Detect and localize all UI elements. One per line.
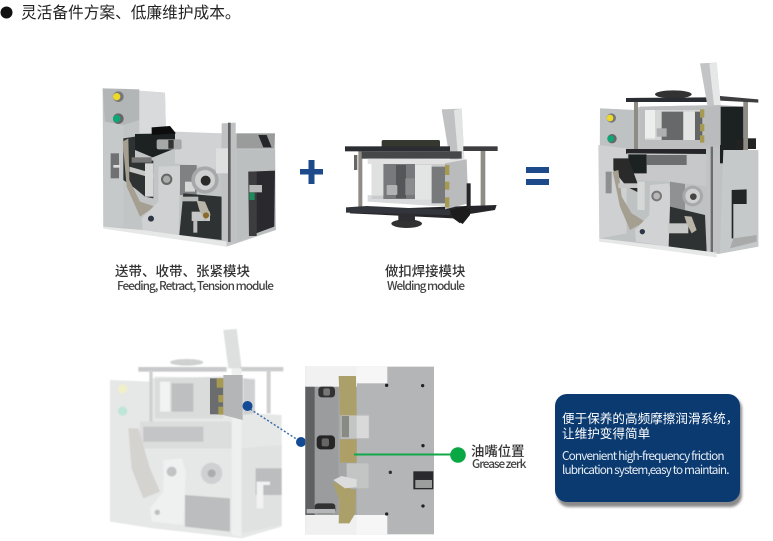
label: welding module (385, 260, 465, 294)
detail photo: grease zerk (305, 367, 434, 534)
callout: lubrication system: 便于保养的高频摩擦润滑系统， (562, 408, 738, 427)
callout: lubrication system: lubrication system,easy to maintain. (562, 461, 729, 478)
green pointer line and dot (354, 447, 466, 463)
callout: lubrication system: 让维护变得简单 (562, 423, 650, 442)
equals sign (526, 167, 549, 185)
machine: feeding, retract, tension module (103, 88, 276, 247)
machine: welding module (345, 109, 498, 228)
label: welding module: Welding module (387, 277, 465, 294)
callout: lubrication system (555, 394, 742, 507)
callout: lubrication system: Convenient high-frequency friction (562, 447, 724, 464)
label: feeding module: 送带、收带、张紧模块 (115, 260, 250, 280)
label: grease zerk (471, 440, 527, 472)
machine: assembled unit (598, 63, 758, 257)
title: 灵活备件方案、低廉维护成本。 (21, 0, 241, 23)
label: feeding module: Feeding, Retract, Tension module (117, 277, 274, 294)
label: welding module: 做扣焊接模块 (385, 260, 465, 280)
dotted connector with blue dots (242, 401, 306, 447)
plus sign (300, 160, 323, 184)
label: grease zerk: 油嘴位置 (471, 440, 525, 460)
label: grease zerk: Grease zerk (472, 455, 527, 472)
label: feeding module (115, 260, 274, 294)
faded machine with highlighted welding head (110, 329, 283, 538)
